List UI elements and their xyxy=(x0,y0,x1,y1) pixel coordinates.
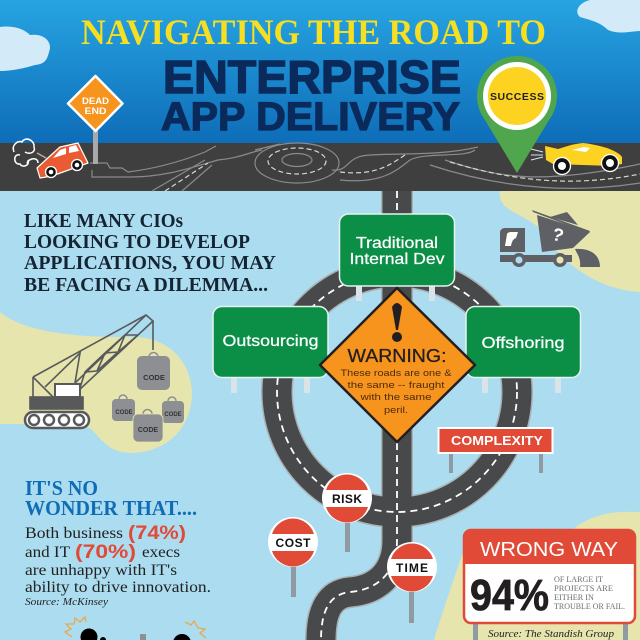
sign: traditional internal dev: Internal Dev xyxy=(350,251,444,268)
icon: code weights: CODE xyxy=(143,373,165,382)
cloud: right xyxy=(577,0,640,33)
cloud: left xyxy=(0,27,50,71)
central roads xyxy=(277,191,517,640)
sign: traditional internal dev: Traditional xyxy=(356,235,438,252)
warning sign: with the same xyxy=(359,392,432,403)
body text: ability to drive innovation. xyxy=(25,579,211,596)
sign: offshoring: Offshoring xyxy=(482,335,564,352)
body text xyxy=(25,523,211,608)
icon: code weights xyxy=(112,352,184,442)
intro text: APPLICATIONS, YOU MAY xyxy=(24,252,277,274)
icon: code weights: CODE xyxy=(115,410,133,416)
heading: it's no wonder: IT'S NO xyxy=(25,476,98,500)
wrong way sign: OF LARGE IT xyxy=(554,575,603,584)
body text: (74%) xyxy=(128,523,186,544)
sign: complexity xyxy=(438,428,552,473)
icon: dump truck xyxy=(500,210,600,267)
sign: cost: COST xyxy=(276,536,311,550)
sand: top right xyxy=(500,191,640,292)
warning sign: peril. xyxy=(384,405,408,416)
intro text: LIKE MANY CIOs xyxy=(24,210,183,232)
dead end sign: DEAD xyxy=(82,96,110,106)
body text: Both business xyxy=(25,525,123,542)
icon: crane xyxy=(25,315,153,428)
icon: red car xyxy=(37,143,88,178)
wrong way sign: EITHER IN xyxy=(554,593,594,602)
wrong way sign: WRONG WAY xyxy=(480,539,618,561)
heading: it's no wonder: WONDER THAT.... xyxy=(25,496,197,520)
success pin xyxy=(477,56,557,173)
sky xyxy=(0,0,640,143)
success pin: SUCCESS xyxy=(490,91,544,103)
sign: time: TIME xyxy=(396,561,428,575)
sign: offshoring xyxy=(466,306,580,393)
intro text xyxy=(24,210,277,296)
sign: outsourcing xyxy=(213,306,328,393)
warning sign: WARNING: xyxy=(348,346,446,366)
sand: left crane island xyxy=(0,312,192,453)
source: standish group: Source: The Standish Group xyxy=(488,628,614,640)
sign: risk xyxy=(322,473,372,552)
icon: code weights: CODE xyxy=(164,412,182,418)
intro text: LOOKING TO DEVELOP xyxy=(24,231,250,253)
sign: traditional internal dev xyxy=(340,214,454,301)
dead end sign xyxy=(68,76,122,164)
sand: bottom right xyxy=(434,512,640,640)
intro text: BE FACING A DILEMMA... xyxy=(24,274,268,296)
icon: smoke cloud xyxy=(13,139,46,166)
sign: time xyxy=(387,542,437,623)
icon: code weights: CODE xyxy=(138,427,158,434)
wrong way sign: PROJECTS ARE xyxy=(554,584,613,593)
sign: cost xyxy=(268,517,318,597)
people at bottom xyxy=(65,617,206,640)
road band xyxy=(0,143,640,191)
body text: are unhappy with IT's xyxy=(25,562,177,579)
body text: and IT xyxy=(25,544,70,561)
wrong way sign: TROUBLE OR FAIL. xyxy=(554,602,625,611)
title line 2: ENTERPRISE xyxy=(163,51,461,103)
warning sign: the same -- fraught xyxy=(348,380,445,391)
sign: outsourcing: Outsourcing xyxy=(222,333,318,350)
warning sign xyxy=(320,288,475,442)
dead end sign: END xyxy=(84,106,107,116)
icon: yellow car xyxy=(531,143,622,174)
wrong way sign xyxy=(464,530,635,640)
title line 1: NAVIGATING THE ROAD TO xyxy=(81,12,546,52)
sign: risk: RISK xyxy=(332,492,362,506)
heading: it's no wonder xyxy=(25,476,197,520)
body text: execs xyxy=(142,544,180,561)
body text: (70%) xyxy=(75,542,136,563)
body text: Source: McKinsey xyxy=(25,597,109,608)
title line 3: APP DELIVERY xyxy=(161,95,460,139)
sign: complexity: COMPLEXITY xyxy=(451,433,543,448)
main title xyxy=(81,12,546,139)
icon: dump truck: ? xyxy=(550,224,566,246)
wrong way sign: 94% xyxy=(470,571,549,620)
warning sign: These roads are one & xyxy=(340,368,452,379)
